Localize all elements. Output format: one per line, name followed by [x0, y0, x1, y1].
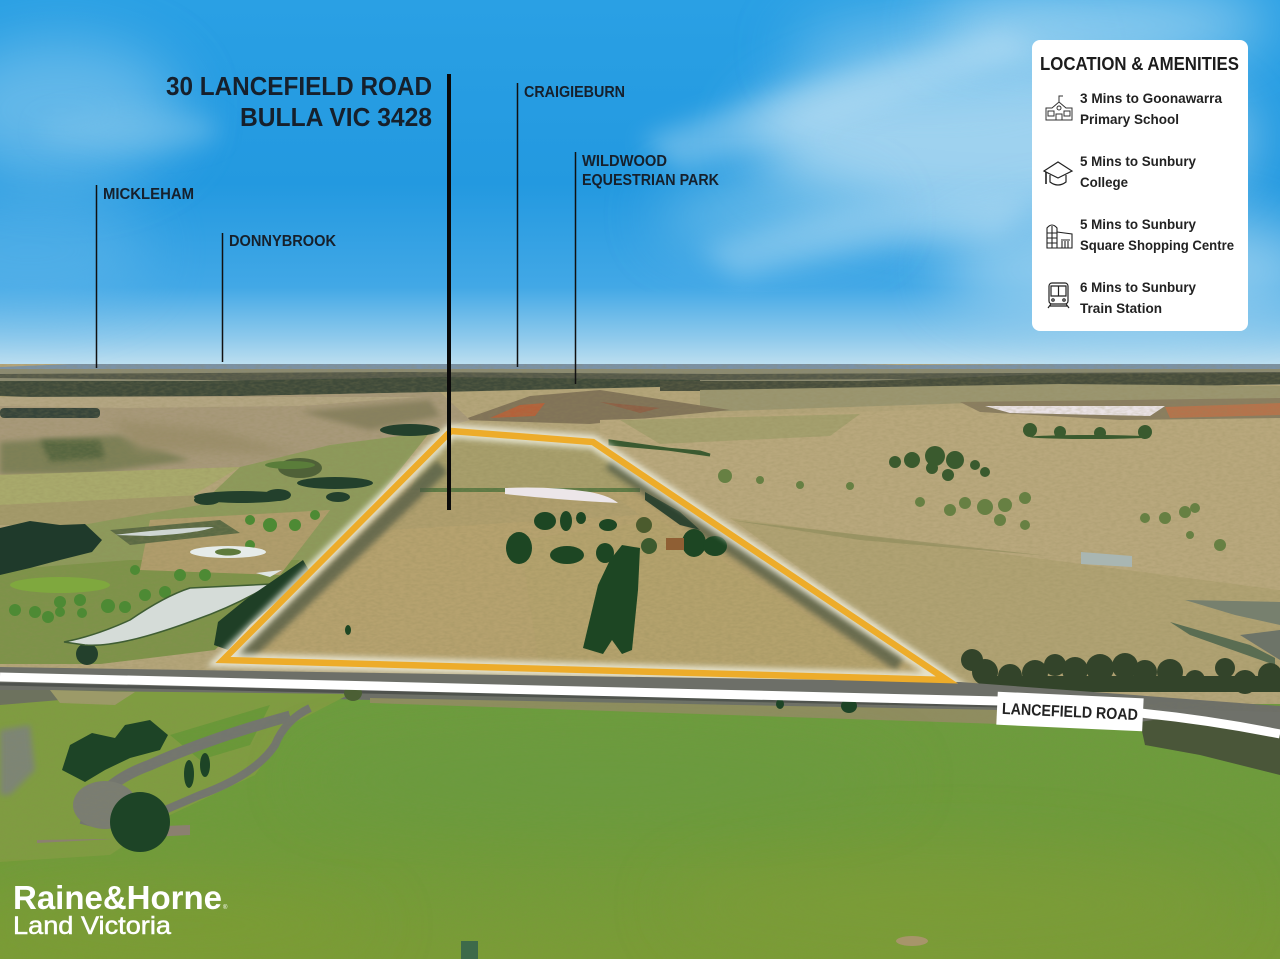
amenity: shopping centre	[1047, 216, 1234, 253]
amenity: train station	[1048, 279, 1196, 316]
road and foreground	[0, 667, 1280, 959]
road surface	[0, 667, 1280, 738]
address heading: 30 LANCEFIELD ROAD	[166, 71, 432, 101]
icon: shopping mall	[1047, 225, 1072, 248]
location marker: Donnybrook: DONNYBROOK	[229, 233, 336, 250]
amenity: college	[1044, 153, 1196, 190]
address heading: BULLA VIC 3428	[240, 102, 432, 132]
property paddock	[264, 492, 913, 670]
location marker: Donnybrook	[222, 233, 336, 362]
fence	[37, 825, 190, 843]
logo: Raine & Horne Land Victoria: ®	[223, 904, 228, 911]
property boundary line	[223, 431, 947, 680]
roadside gum trees	[961, 649, 1280, 694]
distant hills	[0, 364, 1280, 369]
location marker: Wildwood Equestrian Park	[576, 152, 719, 384]
property boundary glow	[223, 431, 947, 680]
driveway	[165, 708, 310, 810]
amenity: train station: 6 Mins to Sunbury	[1080, 279, 1196, 295]
boundary-side trees	[214, 560, 310, 650]
ponds	[115, 527, 214, 536]
location marker: Wildwood Equestrian Park: EQUESTRIAN PARK	[582, 172, 719, 189]
logo: Raine & Horne Land Victoria	[13, 879, 228, 940]
amenity: primary school: Primary School	[1080, 111, 1179, 127]
icon: school building	[1046, 96, 1072, 120]
amenity: primary school: 3 Mins to Goonawarra	[1080, 90, 1222, 106]
amenity: train station: Train Station	[1080, 300, 1162, 316]
property trees	[506, 511, 727, 654]
far-right ridge	[700, 384, 1280, 412]
address pointer line	[447, 74, 451, 510]
panel: location and amenities	[1032, 40, 1248, 331]
sky background	[0, 0, 1280, 368]
right tree clusters	[610, 423, 1226, 551]
road label: LANCEFIELD ROAD	[1002, 701, 1138, 724]
logo: Raine & Horne Land Victoria: Land Victoria	[13, 912, 171, 940]
logo: Raine & Horne Land Victoria: Raine&Horne	[13, 879, 222, 916]
panel heading: LOCATION & AMENITIES	[1040, 54, 1239, 74]
left valley and paddocks	[0, 392, 470, 474]
left pine stand	[0, 521, 102, 575]
road label	[996, 692, 1144, 731]
left tree clusters	[76, 424, 440, 665]
road label line	[0, 677, 1280, 734]
quarry centre	[462, 390, 730, 424]
icon: train	[1048, 283, 1069, 308]
amenity: college: 5 Mins to Sunbury	[1080, 153, 1196, 169]
right paddocks	[600, 418, 644, 423]
shed	[1081, 552, 1132, 567]
grass verge	[370, 698, 1140, 728]
address heading	[166, 71, 432, 132]
location marker: Mickleham: MICKLEHAM	[103, 186, 194, 203]
amenity: primary school	[1046, 90, 1222, 127]
amenity: shopping centre: Square Shopping Centre	[1080, 237, 1234, 253]
right wet area	[1185, 600, 1280, 625]
location marker: Craigieburn: CRAIGIEBURN	[524, 84, 625, 101]
amenity: college: College	[1080, 174, 1128, 190]
left green shrubs	[9, 461, 320, 623]
icon: graduation cap	[1044, 162, 1072, 185]
inner edge shadows	[240, 466, 442, 660]
landscape	[0, 359, 1280, 704]
location marker: Wildwood Equestrian Park: WILDWOOD	[582, 153, 667, 170]
far tree line	[0, 377, 700, 398]
lower-right gum trees	[1140, 716, 1280, 775]
amenity: shopping centre: 5 Mins to Sunbury	[1080, 216, 1196, 232]
green foreground field	[0, 690, 1280, 959]
dam	[505, 488, 618, 503]
lower-left paddock	[0, 690, 350, 862]
